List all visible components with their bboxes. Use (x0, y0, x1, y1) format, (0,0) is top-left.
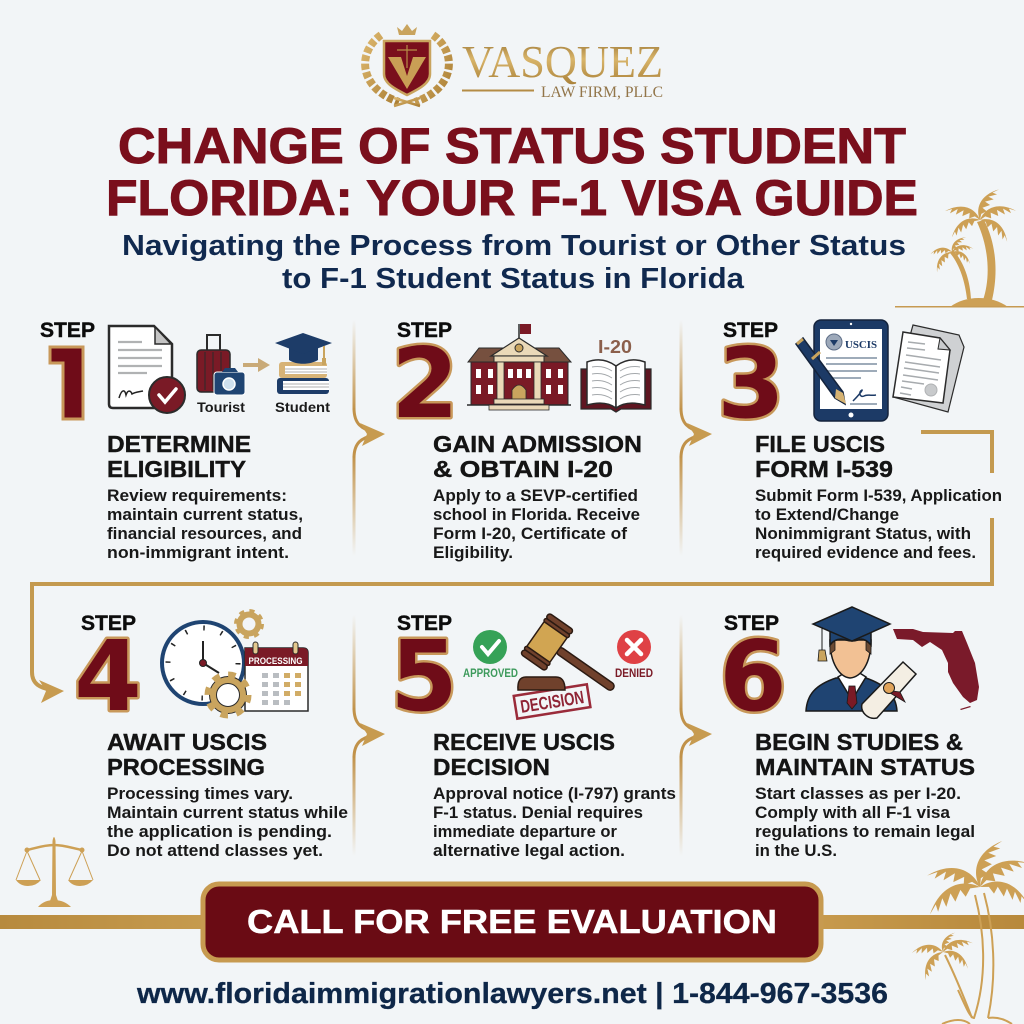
icon: tablet with USCIS form (814, 320, 888, 421)
logo tagline: LAW FIRM, PLLC (541, 84, 663, 101)
icon: small gear (236, 611, 262, 637)
icon: processing calendar (245, 642, 308, 711)
label: I-20: I-20 (598, 337, 632, 357)
heading: FORM I-539 (755, 456, 893, 482)
step number: 6 (719, 620, 787, 733)
description: Approval notice (I-797) grants (433, 784, 676, 803)
icon: suitcase and camera (197, 335, 245, 395)
icon: large gear (208, 674, 248, 716)
description (107, 784, 348, 860)
heading: GAIN ADMISSION (433, 431, 642, 457)
description: Processing times vary. (107, 784, 293, 803)
description (433, 784, 676, 860)
heading: AWAIT USCIS (107, 729, 267, 755)
heading (755, 729, 975, 780)
icon: scales of justice (16, 837, 93, 907)
icon: approved check (473, 630, 507, 664)
icon: diploma (862, 662, 916, 718)
title: FLORIDA: YOUR F-1 VISA GUIDE (106, 170, 918, 226)
step label: STEP (724, 612, 779, 635)
icon: decision stamp: DECISION (519, 687, 585, 717)
heading: & OBTAIN I-20 (433, 456, 613, 482)
logo name: VASQUEZ (462, 36, 663, 87)
heading: FILE USCIS (755, 431, 885, 457)
description: immediate departure or (433, 822, 617, 841)
logo: Vasquez Law Firm (365, 24, 663, 106)
subtitle: Navigating the Process from Tourist or Other Status (122, 230, 906, 262)
icon: processing calendar: PROCESSING (248, 656, 302, 666)
heading: ELIGIBILITY (107, 456, 246, 482)
title (106, 118, 918, 226)
description: to Extend/Change (755, 505, 899, 524)
description (107, 486, 303, 562)
icon: palm trees top right (895, 185, 1024, 308)
icon: tablet with USCIS form: USCIS (845, 339, 877, 351)
arrow: step 2 to step 3 (680, 320, 712, 556)
panel: step 6 (719, 607, 979, 860)
description: non-immigrant intent. (107, 543, 289, 562)
connector arrows (32, 320, 992, 856)
arrow: step 3 to step 4 (32, 432, 992, 703)
icon: Florida map (893, 629, 979, 710)
description: Eligibility. (433, 543, 513, 562)
description (755, 784, 975, 860)
description: Form I-20, Certificate of (433, 524, 627, 543)
step label: STEP (397, 319, 452, 342)
description: financial resources, and (107, 524, 302, 543)
icon: clock (162, 622, 244, 704)
icon: arrow tourist to student (243, 358, 270, 372)
heading: RECEIVE USCIS (433, 729, 615, 755)
description: Start classes as per I-20. (755, 784, 961, 803)
icon: graduation cap on books (275, 333, 332, 394)
icon: signed document with check (109, 326, 185, 413)
icon: shield (384, 41, 430, 95)
description: Apply to a SEVP-certified (433, 486, 638, 505)
description: Review requirements: (107, 486, 287, 505)
description: regulations to remain legal (755, 822, 975, 841)
description: maintain current status, (107, 505, 303, 524)
label: denied: DENIED (615, 668, 653, 680)
step label: STEP (397, 612, 452, 635)
icon: laurel wreath (365, 35, 449, 106)
caption: student: Student (275, 399, 330, 415)
heading: BEGIN STUDIES & (755, 729, 963, 755)
description: Comply with all F-1 visa (755, 803, 951, 822)
description: Submit Form I-539, Application (755, 486, 1002, 505)
heading (433, 431, 642, 482)
caption: tourist: Tourist (197, 399, 245, 415)
heading (107, 729, 267, 780)
step label: STEP (40, 319, 95, 342)
step number: 4 (74, 620, 142, 733)
icon: school building (467, 324, 571, 410)
icon: crown (397, 24, 417, 35)
step number (50, 347, 83, 419)
panel: step 4 (74, 611, 348, 860)
heading: MAINTAIN STATUS (755, 754, 975, 780)
subtitle (122, 230, 906, 295)
gold band behind call to action (0, 915, 1024, 929)
description: Maintain current status while (107, 803, 348, 822)
description: in the U.S. (755, 841, 837, 860)
description: school in Florida. Receive (433, 505, 640, 524)
step label: STEP (723, 319, 778, 342)
heading (433, 729, 615, 780)
description (433, 486, 640, 562)
description (755, 486, 1002, 562)
description: Nonimmigrant Status, with (755, 524, 971, 543)
icon: stack of documents (893, 325, 964, 412)
call to action button (203, 884, 821, 960)
icon: palm trees bottom right (912, 836, 1024, 1024)
panel: step 1 (40, 319, 332, 562)
step number: 5 (390, 620, 458, 733)
call to action button: CALL FOR FREE EVALUATION (247, 903, 777, 940)
step label: STEP (81, 612, 136, 635)
panel: step 5 (390, 612, 676, 860)
description: F-1 status. Denial requires (433, 803, 643, 822)
heading (107, 431, 251, 482)
description: Do not attend classes yet. (107, 841, 323, 860)
icon: open book (581, 360, 651, 412)
heading: PROCESSING (107, 754, 265, 780)
description: alternative legal action. (433, 841, 625, 860)
icon: graduate (806, 607, 897, 711)
website and phone: www.floridaimmigrationlawyers.net | 1-844-967-3536 (136, 978, 888, 1010)
heading: DETERMINE (107, 431, 251, 457)
description: required evidence and fees. (755, 543, 976, 562)
description: the application is pending. (107, 822, 332, 841)
title: CHANGE OF STATUS STUDENT (118, 118, 906, 174)
arrow: step 5 to step 6 (680, 615, 712, 856)
heading (755, 431, 893, 482)
step number: 2 (391, 327, 459, 440)
panel: step 3 (717, 319, 1002, 562)
label: approved: APPROVED (463, 668, 518, 680)
arrow: step 4 to step 5 (352, 615, 385, 856)
icon: denied cross (617, 630, 651, 664)
heading: DECISION (433, 754, 550, 780)
icon: gavel (518, 613, 628, 709)
arrow: step 1 to step 2 (352, 320, 385, 556)
icon: pen (796, 338, 846, 404)
panel: step 2 (391, 319, 651, 562)
subtitle: to F-1 Student Status in Florida (282, 263, 745, 295)
step number: 3 (717, 327, 785, 440)
